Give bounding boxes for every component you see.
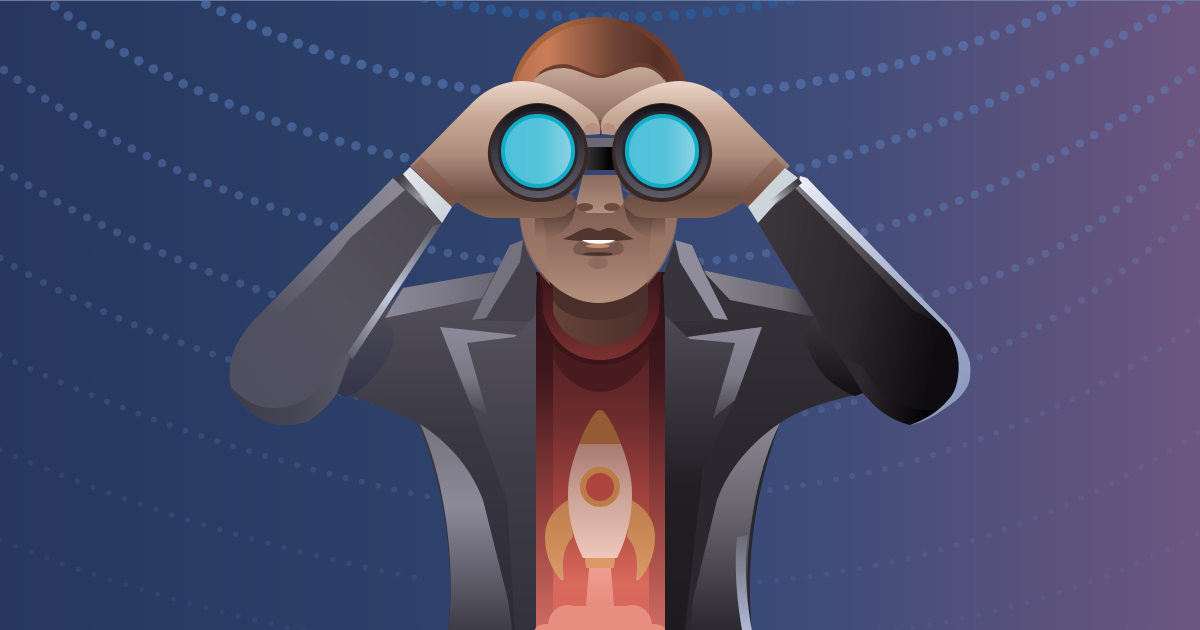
shirt (536, 272, 666, 630)
left barrel (488, 103, 588, 203)
right side highlight (690, 423, 780, 630)
left under-hand shadow (535, 200, 577, 238)
left arm sleeve (230, 175, 442, 425)
jacket torso (337, 270, 866, 630)
right under-hand shadow (623, 200, 665, 238)
right collar back (663, 240, 728, 322)
forehead (520, 67, 680, 120)
right arm top highlight (795, 182, 937, 322)
left arm top highlight (257, 178, 405, 317)
binoculars (488, 103, 712, 203)
right lapel light edge (687, 327, 762, 418)
face right shade (647, 205, 678, 285)
face left shade (519, 205, 550, 285)
right arm light edge (798, 176, 970, 425)
rocket window (583, 470, 617, 504)
right under-arm crescent (803, 317, 866, 396)
exhaust clouds (535, 605, 665, 630)
collar outer (540, 272, 661, 365)
lapels (440, 240, 762, 630)
right barrel (612, 103, 712, 203)
lower lip (573, 241, 624, 256)
shirt inner panel (553, 330, 649, 630)
left arm light edge (348, 223, 442, 360)
left elbow shade (232, 345, 353, 425)
left lapel (440, 315, 536, 630)
left cuff shading (393, 173, 442, 223)
right arm sleeve (758, 176, 970, 425)
right lens (627, 116, 697, 186)
rocket fins (545, 500, 655, 580)
upper lip (563, 228, 634, 241)
left side highlight (420, 424, 512, 630)
rocket flame (586, 568, 614, 606)
left nostril (577, 203, 593, 211)
bridge (583, 138, 617, 170)
left under-arm crescent (337, 317, 393, 397)
right arm lower shade (840, 355, 935, 425)
right collar light edge (675, 240, 728, 320)
bridge top band (583, 138, 617, 147)
right shoulder band (702, 270, 815, 317)
jacket left half (347, 272, 536, 630)
rocket body (568, 444, 632, 558)
rocket nose (579, 410, 621, 444)
rocket nozzle (585, 558, 615, 568)
face (519, 63, 680, 303)
right hand (601, 81, 790, 218)
top edge line (0, 0, 1200, 1)
right nostril (604, 203, 620, 211)
nose (576, 175, 624, 213)
rocket (535, 410, 665, 630)
left wrist shade (412, 157, 462, 207)
left lapel light edge (440, 327, 517, 417)
lip highlight (586, 244, 610, 248)
left hand (410, 81, 600, 218)
right cuff shading (765, 178, 802, 213)
right wrist shade (738, 157, 785, 207)
neck (553, 272, 648, 345)
right lapel (665, 315, 761, 630)
hairline shadow (534, 63, 664, 80)
left lens (503, 116, 573, 186)
lip shadow (583, 252, 613, 256)
collar shadow (553, 300, 649, 392)
left collar light edge (472, 240, 523, 320)
teeth (582, 240, 615, 244)
right shirt cuff (748, 168, 802, 223)
head: hair (511, 17, 687, 130)
left shoulder band (385, 272, 495, 318)
chin dimple (588, 257, 608, 269)
left collar back (472, 240, 537, 322)
left thumb tip (584, 123, 600, 135)
left shirt cuff (393, 167, 452, 223)
jacket right half (665, 270, 863, 630)
right side light stripe (736, 535, 752, 630)
right thumb tip (602, 123, 616, 135)
collar red ring (543, 272, 659, 360)
neck shadow (553, 280, 648, 320)
